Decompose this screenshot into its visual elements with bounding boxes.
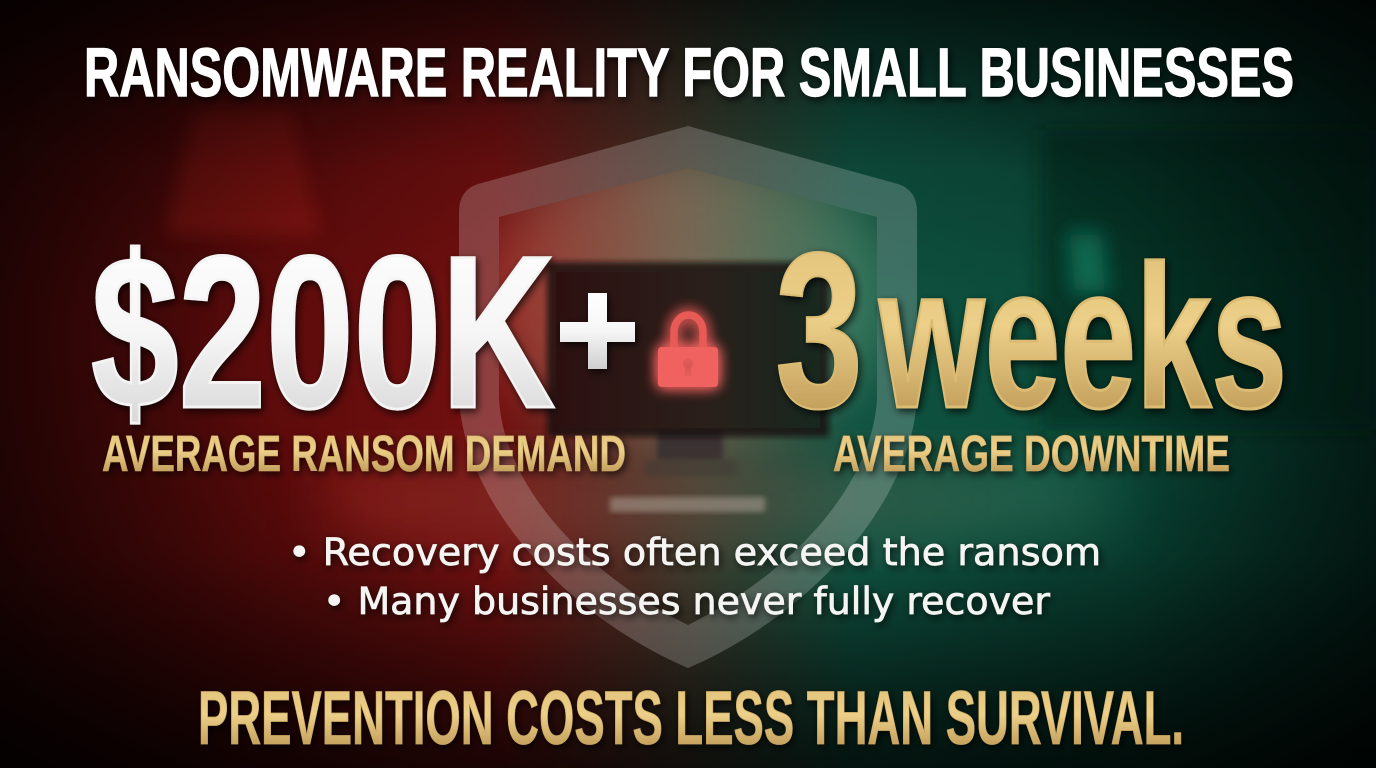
bullet one: • Recovery costs often exceed the ransom [288, 531, 1101, 574]
monitor screen shadow [547, 262, 829, 437]
stat label: AVERAGE RANSOM DEMAND [102, 425, 626, 482]
monitor screen [556, 272, 820, 428]
bullet two: • Many businesses never fully recover [323, 580, 1051, 623]
keyboard [610, 497, 765, 512]
stat: downtime [775, 207, 1287, 482]
plus sign [560, 293, 635, 369]
desk surface [330, 465, 1110, 535]
icon: red padlock [658, 315, 718, 387]
stat value: $200K [91, 211, 555, 453]
blurred bookshelf [1040, 130, 1376, 430]
stat label: AVERAGE DOWNTIME [833, 425, 1230, 482]
blurred lamp [165, 110, 320, 235]
shield band [459, 126, 917, 668]
shield watermark [459, 126, 917, 668]
stat: ransom demand [91, 211, 635, 482]
bullet points [288, 531, 1101, 623]
monitor stand [657, 430, 723, 460]
stat number: 3 [775, 207, 863, 455]
desktop monitor [547, 262, 829, 512]
shield inner glow [499, 168, 877, 462]
